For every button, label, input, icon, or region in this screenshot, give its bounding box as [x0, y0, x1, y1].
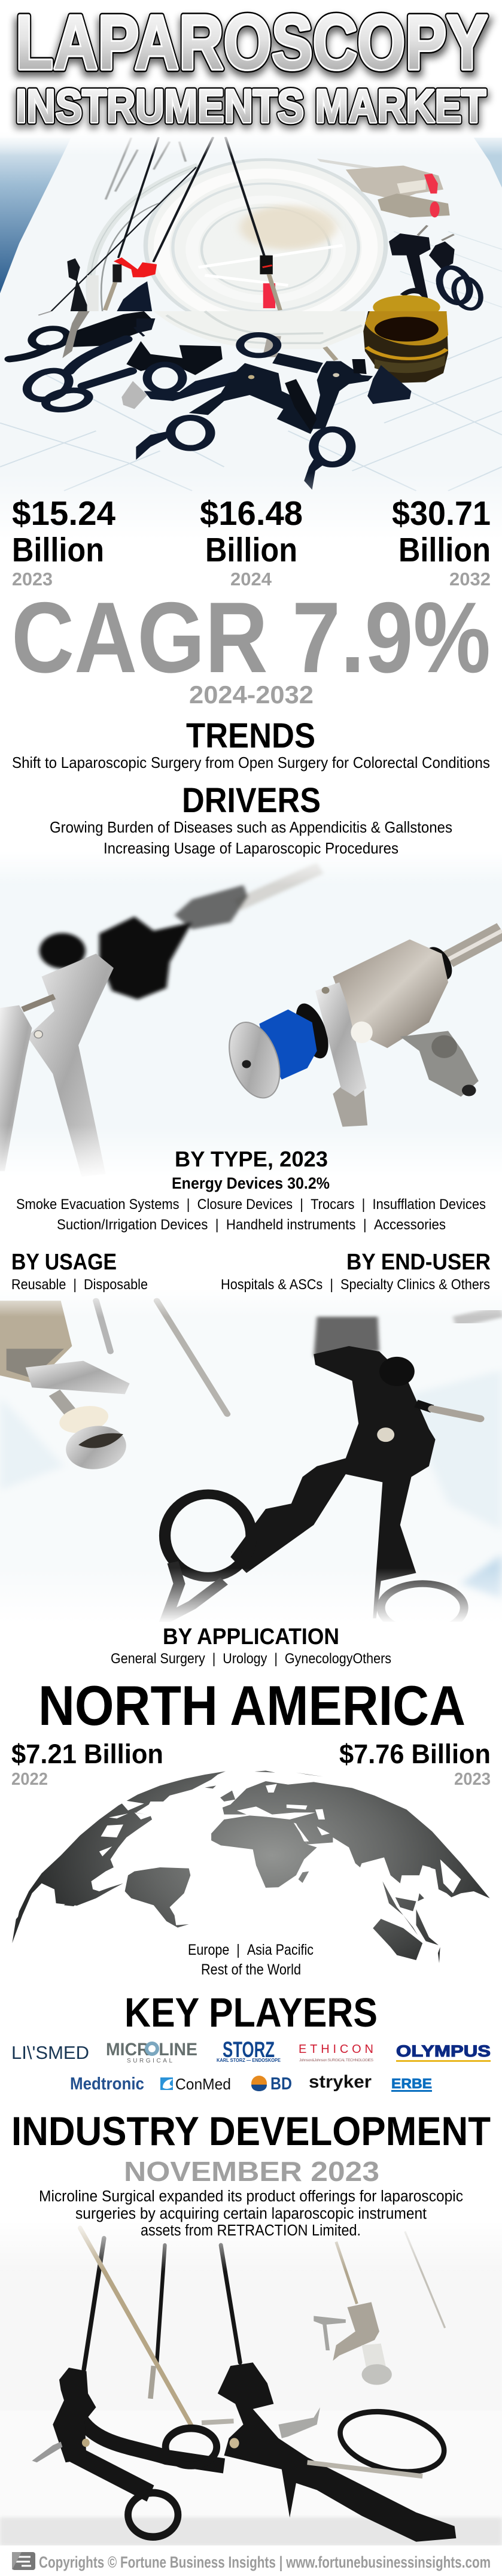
logo: Olympus: OLYMPUS — [396, 2042, 491, 2060]
stat 2024: $16.48 — [200, 494, 303, 533]
far rods — [106, 138, 185, 199]
quilted cloth — [0, 337, 502, 491]
stat 2024 — [200, 494, 303, 590]
logo: Karl Storz: KARL STORZ — ENDOSKOPE — [217, 2058, 281, 2063]
drivers text — [50, 818, 452, 857]
development description: Microline Surgical expanded its product offerings for laparoscopic — [39, 2188, 463, 2205]
by type list — [16, 1196, 486, 1233]
stat 2032: 2032 — [449, 569, 491, 590]
cone knob — [367, 365, 411, 404]
silver valve left — [0, 1301, 72, 1384]
other regions — [188, 1942, 314, 1978]
tube coil bottom — [154, 311, 365, 349]
development description: surgeries by acquiring certain laparoscopic instrument — [75, 2206, 427, 2222]
blue seal — [290, 1000, 335, 1062]
blurred top of scissor — [314, 1317, 379, 1357]
side valve — [400, 1031, 479, 1096]
by end-user block: BY END-USER — [346, 1250, 491, 1275]
south america continent — [125, 1867, 190, 1928]
logo: Livsmed: LI\'SMED — [11, 2042, 89, 2063]
by usage block: BY USAGE — [11, 1250, 117, 1275]
north america value 2023: 2023 — [454, 1770, 491, 1789]
handle right — [312, 361, 373, 429]
market values row — [12, 494, 491, 590]
stat 2032 — [392, 494, 491, 590]
logo: BD — [251, 2074, 292, 2094]
eurasia continent — [223, 1781, 490, 1898]
CAGR period: 2024-2032 — [189, 681, 314, 709]
valve right — [314, 2302, 392, 2385]
shafts — [84, 2238, 240, 2370]
logo: Stryker: stryker — [309, 2072, 372, 2092]
north america value 2022: $7.21 Billion — [11, 1739, 163, 1769]
by usage block — [11, 1250, 148, 1293]
stat 2032: $30.71 — [392, 494, 491, 533]
logo: Karl Storz: STORZ — [223, 2037, 275, 2062]
australia — [373, 1919, 422, 1960]
icon: fortune business insights logo — [12, 2552, 35, 2570]
pin and pivot — [416, 1404, 432, 1409]
black shafts — [51, 138, 264, 311]
drivers heading: DRIVERS — [182, 781, 321, 820]
logo: Medtronic: Medtronic — [70, 2074, 144, 2094]
north america value 2022: 2022 — [11, 1770, 48, 1789]
blurred background instrument — [39, 868, 320, 1000]
hero fades — [0, 132, 502, 540]
north america value 2023 — [339, 1739, 491, 1789]
development description: assets from RETRACTION Limited. — [141, 2222, 361, 2239]
arctic islands — [205, 1770, 323, 1788]
photo: black scissor handle — [0, 1290, 502, 1632]
logo: Microline: MICR LINE — [106, 2040, 197, 2059]
jar rim — [373, 295, 440, 319]
left black handle — [74, 2417, 224, 2537]
seas cut-outs — [99, 1784, 461, 1893]
logo: Ethicon — [299, 2043, 374, 2062]
by type list: Suction/Irrigation Devices | Handheld instruments | Accessories — [57, 1217, 446, 1233]
photo 4 fades — [0, 2217, 502, 2576]
rods right — [336, 2242, 357, 2304]
north america value 2023: $7.76 Billion — [339, 1739, 491, 1769]
scissor body — [230, 1346, 436, 1618]
stat 2023: Billion — [12, 531, 104, 569]
left tubing — [90, 166, 199, 311]
handle upper-left — [10, 324, 73, 359]
back right black handles — [389, 233, 455, 303]
trocar body — [333, 940, 448, 1048]
world map globe — [12, 1770, 490, 1963]
footer — [12, 2552, 491, 2571]
far left black clips — [67, 259, 90, 311]
africa continent — [211, 1815, 317, 1888]
by application heading: BY APPLICATION — [163, 1624, 339, 1650]
logo: Karl Storz — [217, 2037, 281, 2063]
stat 2024: Billion — [205, 531, 297, 569]
photo 2 fades — [0, 850, 502, 1292]
by type leading share: Energy Devices 30.2% — [172, 1174, 330, 1192]
north america continent — [12, 1771, 226, 1943]
north america value 2022 — [11, 1739, 163, 1789]
hero lower section: jar and black handles — [0, 311, 502, 539]
handle top ring — [240, 335, 277, 356]
stat 2032: Billion — [398, 531, 491, 569]
title — [13, 0, 490, 136]
hero upper section: tubing, shafts, valves — [0, 132, 502, 331]
photo: trocar and silver instrument — [0, 850, 502, 1194]
hero photo: laparoscopic instruments on cloth — [0, 132, 502, 539]
key player logos — [11, 2037, 491, 2094]
tip of centre scope — [260, 256, 273, 274]
key players heading: KEY PLAYERS — [124, 1989, 378, 2036]
logo: BD: BD — [270, 2074, 292, 2094]
handle mid-left — [19, 339, 131, 414]
other regions: Europe | Asia Pacific — [188, 1942, 314, 1958]
lever — [333, 1068, 367, 1127]
blurred pins — [96, 1301, 111, 1351]
logo: Ethicon: ETHICON — [299, 2043, 373, 2056]
photo 3 fades — [0, 1287, 502, 1748]
amber jar — [363, 311, 448, 383]
red ties — [114, 257, 157, 277]
uk — [220, 1791, 235, 1802]
by usage block: Reusable | Disposable — [11, 1277, 148, 1293]
logo: Microline: SURGICAL — [127, 2058, 172, 2064]
madagascar — [299, 1872, 309, 1883]
by type heading: BY TYPE, 2023 — [175, 1147, 328, 1171]
logo: ConMed: ConMed — [175, 2075, 231, 2093]
handle head — [117, 281, 152, 311]
trends heading: TRENDS — [186, 716, 315, 755]
right black handle — [218, 2362, 456, 2542]
metal valves top right — [317, 159, 450, 217]
blue floor left — [0, 138, 71, 293]
trocar shaft — [448, 931, 502, 959]
silver cylinder — [121, 381, 147, 409]
drivers text: Increasing Usage of Laparoscopic Procedures — [104, 839, 398, 857]
stat 2023: 2023 — [12, 569, 53, 590]
stat 2023: $15.24 — [12, 494, 115, 533]
handle centre — [144, 371, 237, 401]
photo: instruments on white sheet — [0, 2221, 502, 2546]
other regions: Rest of the World — [201, 1961, 301, 1978]
logo: Ethicon: Johnson&Johnson SURGICAL TECHNOLOGIES — [299, 2058, 374, 2062]
by end-user block — [221, 1250, 491, 1293]
steel disc — [220, 1017, 288, 1103]
gold rod — [80, 2228, 194, 2430]
coiled clear tubing — [145, 160, 386, 331]
southeast asia islands — [382, 1881, 440, 1963]
stat 2023 — [12, 494, 115, 590]
development description — [39, 2188, 463, 2239]
stat 2024: 2024 — [230, 569, 272, 590]
region heading: NORTH AMERICA — [38, 1674, 466, 1737]
drivers text: Growing Burden of Diseases such as Appendicitis & Gallstones — [50, 818, 452, 836]
by application list: General Surgery | Urology | GynecologyOthers — [111, 1651, 391, 1667]
logo: Erbe: ERBE — [391, 2076, 432, 2091]
silver handle — [27, 953, 114, 1177]
date: NOVEMBER 2023 — [124, 2156, 379, 2187]
